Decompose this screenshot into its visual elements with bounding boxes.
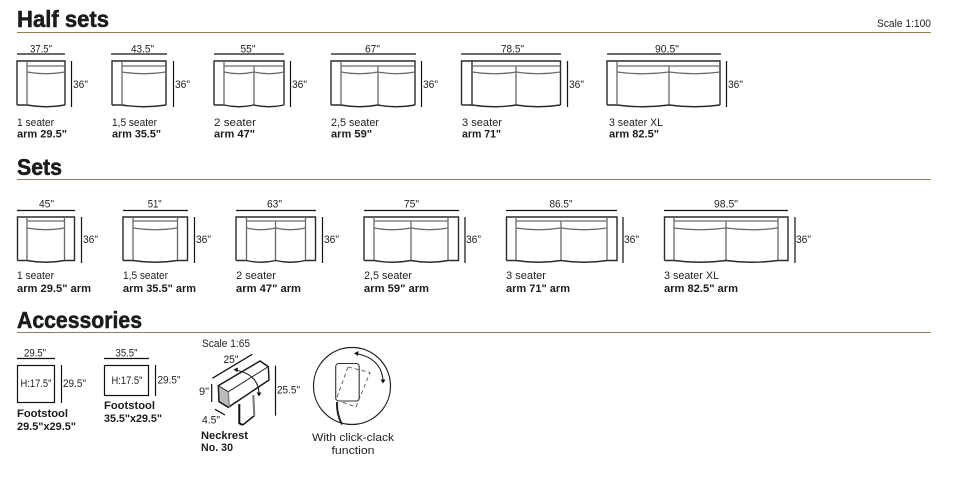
set: 2,5 seater: 36" [466, 234, 481, 246]
set: 1,5 seater: 1,5 seater [123, 270, 168, 282]
set: 2 seater: 2 seater [236, 270, 276, 282]
half set: 2,5 seater [331, 44, 438, 140]
half set: 1 seater: 37.5" [30, 44, 52, 56]
set: 2 seater: arm 47" arm [236, 283, 301, 295]
footstool 29.5 x 29.5: H:17.5" [20, 378, 52, 390]
half set: 1,5 seater: 43.5" [131, 44, 154, 56]
footstool 35.5 x 29.5 [104, 348, 181, 425]
neckrest No. 30 [199, 338, 300, 454]
half set: 2,5 seater: 2,5 seater [331, 117, 379, 129]
set: 1,5 seater: arm 35.5" arm [123, 283, 196, 295]
set: 1,5 seater [123, 199, 211, 295]
set: 3 seater XL: arm 82.5" arm [664, 283, 738, 295]
half set: 2,5 seater: 36" [423, 79, 438, 91]
set: 3 seater: arm 71" arm [506, 283, 570, 295]
set: 2 seater: 36" [324, 234, 339, 246]
footstool 35.5 x 29.5: 29.5" [158, 374, 181, 386]
footstool 35.5 x 29.5: 35.5"x29.5" [104, 413, 162, 425]
set: 2 seater: 63" [267, 199, 282, 211]
half set: 3 seater: 36" [569, 79, 584, 91]
half set: 1 seater: 36" [73, 79, 88, 91]
set: 3 seater: 36" [624, 234, 639, 246]
half set: 2,5 seater: arm 59" [331, 128, 372, 140]
footstool 35.5 x 29.5: Footstool [104, 400, 155, 412]
click-clack function diagram: With click-clack [312, 432, 395, 444]
set: 3 seater [506, 199, 639, 295]
half set: 1,5 seater: 36" [175, 79, 190, 91]
heading: Sets: Sets [17, 154, 62, 180]
half set: 2,5 seater: 67" [365, 44, 380, 56]
footstool 29.5 x 29.5 [17, 348, 86, 433]
set: 2 seater [236, 199, 339, 295]
half set: 3 seater: arm 71" [462, 128, 501, 140]
scale note: Scale 1:100 [877, 18, 931, 30]
set: 1 seater [17, 199, 98, 295]
half set: 1 seater: arm 29.5" [17, 128, 67, 140]
footstool 35.5 x 29.5: H:17.5" [112, 375, 143, 387]
set: 3 seater XL: 3 seater XL [664, 270, 719, 282]
footstool 35.5 x 29.5: 35.5" [116, 348, 138, 360]
half set: 3 seater XL: 3 seater XL [609, 117, 663, 129]
half set: 1,5 seater: 1,5 seater [112, 117, 157, 129]
footstool 29.5 x 29.5: 29.5"x29.5" [17, 421, 76, 433]
half set: 3 seater XL: 36" [728, 79, 743, 91]
half set: 1 seater: 1 seater [17, 117, 54, 129]
neckrest No. 30: 9" [199, 386, 209, 398]
set: 1 seater: 45" [39, 199, 54, 211]
half set: 2 seater: 55" [240, 44, 256, 56]
half set: 3 seater: 78.5" [501, 44, 524, 56]
half set: 2 seater [214, 44, 307, 140]
set: 1 seater: arm 29.5" arm [17, 283, 91, 295]
neckrest No. 30: Neckrest [201, 430, 248, 442]
set: 2,5 seater: 2,5 seater [364, 270, 412, 282]
set: 3 seater XL: 98.5" [714, 199, 738, 211]
half set: 3 seater XL: arm 82.5" [609, 128, 659, 140]
set: 2,5 seater: 75" [404, 199, 419, 211]
footstool 29.5 x 29.5: 29.5" [24, 348, 46, 360]
set: 2,5 seater [364, 199, 481, 295]
neckrest No. 30: No. 30 [201, 442, 233, 454]
set: 3 seater XL [664, 199, 811, 295]
half set: 3 seater [461, 44, 584, 140]
heading: Accessories: Accessories [17, 307, 142, 333]
half set: 2 seater: arm 47" [214, 128, 255, 140]
neckrest No. 30: 25.5" [277, 384, 300, 396]
footstool 29.5 x 29.5: Footstool [17, 408, 68, 420]
half set: 1,5 seater: arm 35.5" [112, 128, 161, 140]
half set: 3 seater: 3 seater [462, 117, 502, 129]
click-clack function diagram: function [332, 445, 374, 457]
set: 1,5 seater: 36" [196, 234, 211, 246]
set: 1 seater: 1 seater [17, 270, 54, 282]
set: 2,5 seater: arm 59" arm [364, 283, 429, 295]
click-clack function diagram [312, 348, 395, 457]
half set: 3 seater XL: 90.5" [655, 44, 679, 56]
half set: 2 seater: 36" [292, 79, 307, 91]
set: 3 seater: 86.5" [550, 199, 573, 211]
footstool 29.5 x 29.5: 29.5" [63, 378, 86, 390]
neckrest No. 30: 25" [224, 354, 239, 366]
half set: 3 seater XL [607, 44, 743, 140]
set: 1 seater: 36" [83, 234, 98, 246]
heading: Half sets: Half sets [17, 6, 109, 32]
set: 3 seater XL: 36" [796, 234, 811, 246]
set: 3 seater: 3 seater [506, 270, 546, 282]
neckrest No. 30: Scale 1:65 [202, 338, 250, 350]
set: 1,5 seater: 51" [148, 199, 162, 211]
half set: 1 seater [17, 44, 88, 140]
half set: 1,5 seater [111, 44, 190, 140]
half set: 2 seater: 2 seater [214, 117, 256, 129]
neckrest No. 30: 4.5" [202, 414, 220, 426]
